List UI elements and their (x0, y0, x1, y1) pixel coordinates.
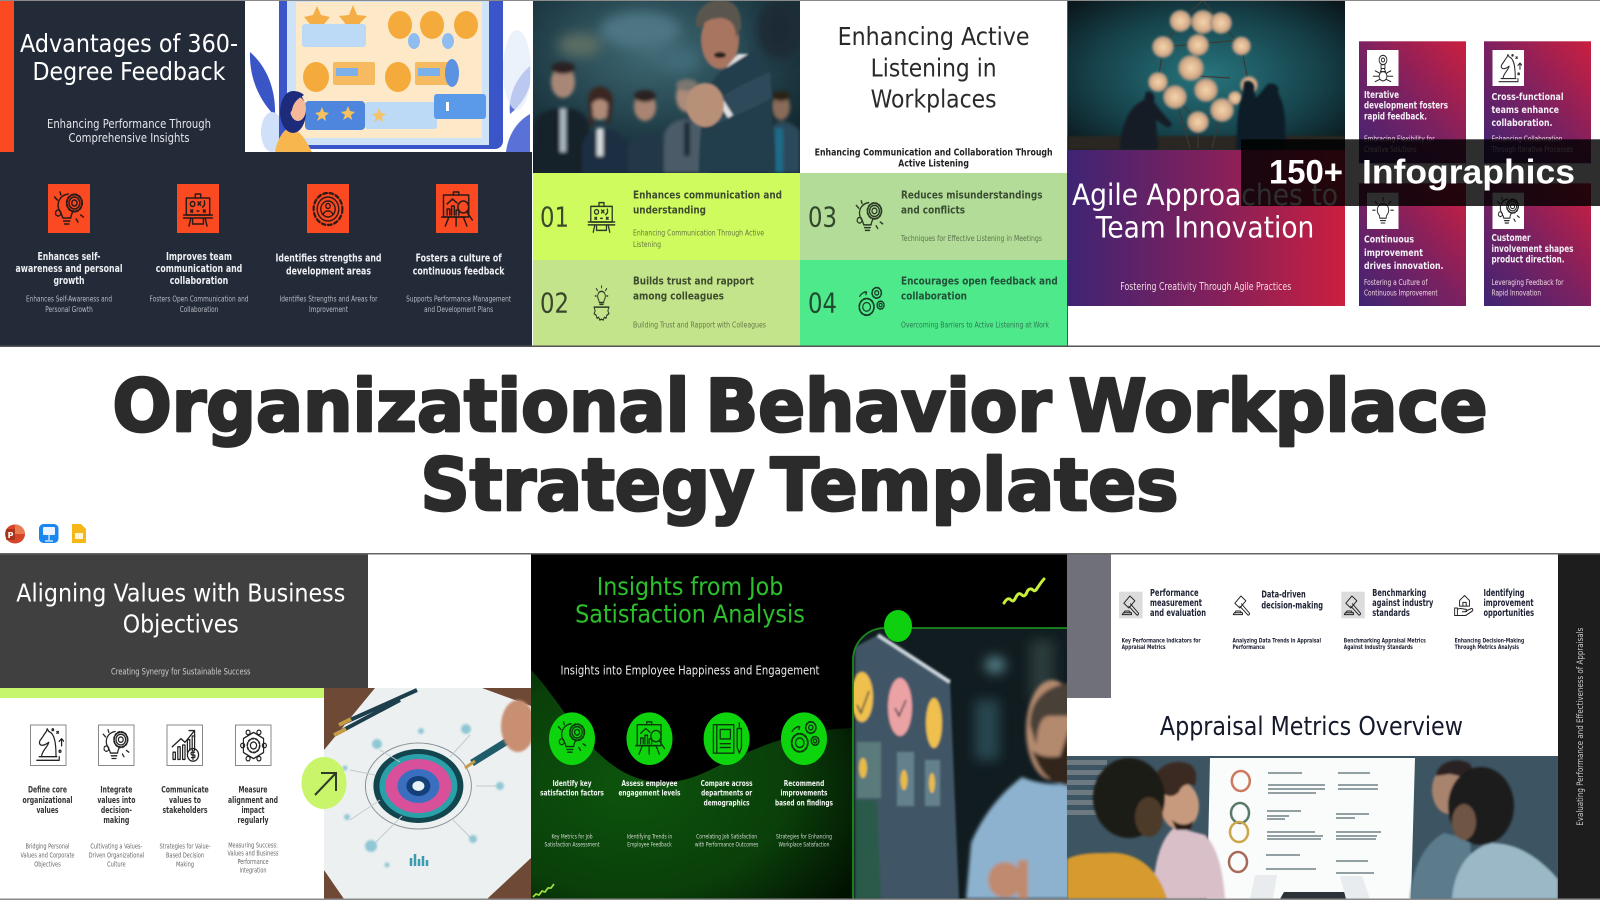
step 2 text: Integrate (100, 786, 132, 796)
metric 3 (1341, 588, 1433, 651)
icon: knight (30, 725, 66, 766)
item 1: self-awareness (16, 184, 122, 314)
item 3 text: Correlating Job Satisfaction (696, 833, 757, 840)
panel: Aligning Values with Business Objectives (0, 554, 535, 899)
item 3: strengths (276, 184, 382, 314)
title: Team Innovation (1095, 211, 1314, 245)
step 1 text: Define core (28, 786, 67, 796)
step 2 text: Culture (107, 860, 126, 868)
banner text (1269, 153, 1575, 191)
decor: green dot (884, 610, 912, 642)
panel: Agile Approaches to Team Innovation (1067, 0, 1600, 346)
icon: Keynote (39, 524, 58, 543)
card 3 text: drives innovation. (1364, 261, 1444, 272)
step 4 text: regularly (238, 816, 269, 826)
title (575, 572, 805, 629)
text 03: Techniques for Effective Listening in Meetings (900, 234, 1042, 243)
subtitle (47, 116, 211, 145)
item 2: team communication (150, 184, 249, 314)
step 1 (20, 725, 74, 868)
metric 3 text: Benchmarking (1372, 588, 1426, 599)
metric 2 text: Data-driven (1261, 590, 1306, 601)
item 2 text: Identifying Trends in (627, 833, 672, 840)
card 4 text (1492, 233, 1574, 297)
icon: gear bulb (1492, 193, 1524, 229)
number 01: 01 (540, 201, 569, 234)
text 02: Builds trust and rapport (633, 275, 754, 288)
step 3 text: Strategies for Value- (160, 842, 211, 850)
text 02: Building Trust and Rapport with Colleagues (633, 320, 766, 329)
icon: growth chart (167, 725, 202, 766)
step 3 text: Communicate (161, 786, 209, 796)
item 3 text: departments or (701, 789, 752, 798)
text: strengths: Identifies Strengths and Areas for (280, 294, 378, 304)
step 3 text: stakeholders (162, 806, 208, 816)
metric 1 text: Key Performance Indicators for (1122, 636, 1201, 644)
step 4 (228, 725, 279, 874)
text: continuous feedback: Fosters a culture of (416, 252, 502, 264)
illustration: feedback dashboard (245, 0, 532, 152)
number 02: 02 (540, 287, 569, 320)
icon: notebook badge (704, 712, 750, 765)
metric 4 text: Through Metrics Analysis (1455, 643, 1519, 651)
text: self-awareness (16, 251, 122, 314)
metric 2 (1232, 590, 1323, 651)
icon: Google Slides (72, 524, 86, 543)
metric 4 text: Identifying (1484, 588, 1524, 599)
card 2 text (1491, 92, 1573, 154)
icon: bulb gear (594, 286, 609, 320)
text: team communication: Improves team (166, 251, 232, 263)
metric 3 text: Benchmarking Appraisal Metrics (1344, 636, 1426, 644)
icon: gears (859, 288, 884, 315)
cell 04 (800, 260, 1067, 346)
main heading: Strategy (420, 443, 754, 527)
step 3 text: Based Decision (166, 851, 204, 859)
panel: Advantages of 360-Degree Feedback (0, 0, 532, 346)
arrow badge (302, 757, 346, 809)
card 3 text: improvement (1364, 248, 1423, 259)
icon: gear bulb (48, 184, 90, 233)
title: Degree Feedback (32, 57, 226, 86)
text 04 (901, 275, 1058, 329)
card 4 text: Customer (1492, 233, 1531, 244)
subtitle: Active Listening (898, 158, 969, 169)
card 2 (1484, 41, 1591, 163)
text: continuous feedback: continuous feedback (413, 266, 505, 278)
text 01: Enhancing Communication Through Active (633, 229, 764, 238)
title block: gradient (1067, 150, 1345, 306)
text: continuous feedback: Supports Performance Management (406, 294, 511, 304)
title: Enhancing Active (838, 22, 1030, 51)
item 4 text: improvements (780, 789, 828, 798)
text 03: and conflicts (901, 203, 965, 216)
step 4 text: Measure (238, 786, 268, 796)
main heading: Organizational (112, 364, 690, 448)
card 2 text: Through Iterative Processes (1491, 145, 1573, 154)
title (1072, 178, 1338, 245)
item 4 text: based on findings (775, 798, 833, 807)
metric 4 text: Enhancing Decision-Making (1455, 636, 1524, 644)
metric 1 text: measurement (1150, 598, 1202, 609)
card 4 text: product direction. (1492, 255, 1564, 266)
title (20, 29, 238, 86)
step 2 text: Driven Organizational (89, 851, 144, 859)
metric 4 text (1455, 588, 1534, 651)
step 1 text: Values and Corporate (20, 851, 74, 859)
step 3 text: Making (176, 860, 194, 868)
text: team communication: communication and (156, 263, 242, 275)
text: continuous feedback (406, 252, 511, 314)
text: strengths: development areas (286, 266, 371, 278)
title (838, 22, 1030, 113)
item 3 text: demographics (704, 798, 750, 807)
card 3 text (1364, 235, 1444, 297)
icon: PowerPoint: P (8, 531, 14, 540)
icon: board (588, 203, 615, 232)
title: Workplaces (871, 84, 997, 113)
text 04: collaboration (901, 290, 967, 303)
card 3 (1359, 183, 1466, 306)
text: self-awareness: growth (54, 275, 84, 287)
text 03: Reduces misunderstandings (901, 189, 1043, 202)
banner text: 150+ (1269, 153, 1343, 191)
photo: light sculpture (1068, 0, 1345, 150)
item 2 (618, 712, 681, 849)
item 4 (775, 712, 833, 849)
metric 1 text: Performance (1150, 588, 1198, 599)
card 1 text (1364, 90, 1448, 154)
step 2 text: decision- (101, 806, 132, 816)
metric 1 text: and evaluation (1150, 608, 1206, 619)
subtitle (815, 148, 1053, 169)
icon: gear bulb badge (549, 712, 595, 765)
grey block (1067, 554, 1111, 698)
step 4 text: Performance (238, 858, 268, 866)
title: Appraisal Metrics Overview (1160, 712, 1463, 742)
photo: team meeting at whiteboard (1067, 756, 1558, 899)
text: team communication: Fosters Open Communication and (150, 294, 249, 304)
icon: gear person (307, 184, 349, 233)
step 2 text (89, 786, 144, 868)
item 1 text: Satisfaction Assessment (544, 842, 600, 849)
icon: hand and house (1455, 596, 1473, 616)
text 01: understanding (633, 203, 706, 216)
text: continuous feedback: and Development Plans (424, 305, 493, 314)
banner: 150+ Infographics (1241, 139, 1600, 206)
subtitle: Insights into Employee Happiness and Engagement (560, 663, 820, 677)
cell 03 (800, 173, 1067, 260)
metric 1 (1119, 588, 1206, 651)
icon: gavel (1341, 592, 1365, 618)
cell 02 (533, 260, 800, 346)
title: Objectives (123, 609, 239, 638)
card 3 text: Continuous (1364, 235, 1414, 246)
main heading (112, 364, 1488, 527)
step 1 text: Objectives (34, 860, 61, 868)
icon: chess knight (1492, 50, 1524, 86)
green wave (531, 670, 860, 899)
main heading: Workplace (1068, 364, 1488, 448)
text 03 (900, 189, 1043, 243)
icon: robot bulb (1367, 50, 1398, 86)
step 2 text: Cultivating a Values- (90, 842, 143, 850)
step 4 text: alignment and (228, 796, 278, 806)
item 3 text: Compare across (701, 779, 753, 788)
item 1 text: satisfaction factors (540, 789, 604, 798)
step 4 text: impact (242, 806, 264, 816)
icon: chart board (436, 184, 478, 233)
item 1 text: Identify key (552, 779, 592, 788)
card 4 text: Leveraging Feedback for (1492, 278, 1564, 287)
app icons (5, 524, 86, 544)
card 1 text: Iterative (1364, 90, 1399, 101)
card 1 text: Creative Solutions (1364, 145, 1417, 154)
metric 1 text: Appraisal Metrics (1122, 643, 1166, 651)
card 1 text: rapid feedback. (1364, 111, 1427, 122)
title: Agile Approaches to (1072, 178, 1338, 212)
text: strengths (276, 252, 382, 314)
item 3 text: with Performance Outcomes (695, 842, 758, 849)
title: Satisfaction Analysis (575, 600, 805, 629)
step 2 (89, 725, 144, 868)
metric 3 text: Against Industry Standards (1344, 643, 1413, 651)
icon: gavel (1119, 592, 1143, 618)
title: Aligning Values with Business (16, 579, 345, 608)
accent bar (0, 0, 14, 152)
item 2 text: Assess employee (622, 779, 678, 788)
text 01 (633, 189, 782, 249)
step 4 text: Integration (240, 866, 266, 874)
main heading: Behavior (706, 364, 1052, 448)
text: team communication: collaboration (170, 275, 228, 287)
card 4 text: involvement shapes (1492, 244, 1574, 255)
metric 3 text (1344, 588, 1433, 651)
step 3 text (160, 786, 211, 868)
icon: strategy board (177, 184, 219, 233)
card 1 (1359, 41, 1466, 163)
text 02: among colleagues (633, 290, 724, 303)
metric 2 text: decision-making (1261, 601, 1323, 612)
text: self-awareness: Enhances self- (38, 251, 100, 263)
text 02 (633, 275, 766, 329)
text: self-awareness: awareness and personal (16, 263, 122, 275)
banner text: Infographics (1362, 153, 1575, 191)
title (16, 579, 345, 638)
metric 3 text: against industry (1372, 598, 1433, 609)
step 3 text: values to (169, 796, 201, 806)
photo: feedback board with smiling man (851, 628, 1078, 900)
number 04: 04 (808, 287, 837, 320)
subtitle: Enhancing Communication and Collaboration Through (815, 148, 1053, 159)
card 4 (1484, 183, 1591, 306)
icon: chart board badge (626, 712, 672, 765)
metric 2 text: Performance (1232, 643, 1265, 651)
card 1 text: development fosters (1364, 101, 1448, 112)
metric 4 text: opportunities (1484, 608, 1534, 619)
icon: light bulb (1367, 193, 1398, 229)
photo: target diagram on paper (324, 688, 535, 899)
item 1 (540, 712, 604, 849)
step 4 text: Values and Business (228, 850, 279, 858)
header band (0, 554, 368, 688)
metric 3 text: standards (1372, 608, 1410, 619)
panel: Enhancing Active Listening in Workplaces (532, 0, 1067, 346)
title: Advantages of 360- (20, 29, 238, 58)
step 2 text: values into (97, 796, 135, 806)
item 2 text: engagement levels (618, 789, 681, 798)
panel: Appraisal Metrics Overview (1067, 554, 1600, 899)
vertical subtitle: Evaluating Performance and Effectiveness of Appraisals (1576, 627, 1586, 826)
number 03: 03 (808, 201, 837, 234)
item 4 text: Workplace Satisfaction (778, 842, 830, 849)
text: team communication: Collaboration (180, 305, 218, 314)
step 1 text: values (36, 806, 58, 816)
item 1 text (540, 779, 604, 849)
metric 4 text: improvement (1484, 598, 1534, 609)
card 2 text: teams enhance (1492, 105, 1559, 116)
card 2 text: collaboration. (1492, 118, 1552, 129)
decor: lime squiggle (1004, 579, 1044, 603)
panel: Insights from Job Satisfaction Analysis (531, 554, 1078, 900)
icon: gear bulb (856, 201, 883, 230)
step 3 (160, 725, 211, 868)
item 1 text: Key Metrics for Job (552, 833, 593, 840)
image frame (853, 628, 1067, 899)
item 3 text (695, 779, 758, 849)
metric 2 text: Analyzing Data Trends in Appraisal (1232, 636, 1321, 644)
text: self-awareness: Personal Growth (45, 305, 93, 314)
metric 1 text (1122, 588, 1206, 651)
icon: gear bulb (98, 725, 134, 766)
item 3 (695, 712, 758, 849)
text 01: Listening (633, 240, 661, 249)
title: Listening in (871, 54, 997, 83)
subtitle: Creating Synergy for Sustainable Success (111, 667, 251, 677)
step 1 text: organizational (22, 796, 72, 806)
metric 2 text (1232, 590, 1323, 651)
step 4 text (228, 786, 279, 874)
metric 4 (1455, 588, 1534, 651)
icon: network gear (236, 725, 271, 766)
subtitle: Fostering Creativity Through Agile Practices (1120, 281, 1291, 293)
card 3 text: Fostering a Culture of (1364, 278, 1428, 287)
item 2 text (618, 779, 681, 849)
text: self-awareness: Enhances Self-Awareness and (26, 294, 112, 304)
card 4 text: Rapid Innovation (1492, 288, 1541, 297)
card 2 text: Enhancing Collaboration (1492, 135, 1563, 144)
subtitle: Enhancing Performance Through (47, 116, 211, 131)
decor: small squiggle (533, 884, 554, 897)
text: strengths: Improvement (309, 305, 348, 314)
text 01: Enhances communication and (633, 189, 782, 202)
side strip (1558, 554, 1600, 899)
text 04: Encourages open feedback and (901, 275, 1058, 288)
title: Insights from Job (597, 572, 783, 601)
item 4 text: Strategies for Enhancing (776, 833, 832, 840)
icon: gears badge (781, 712, 827, 765)
cell 01 (533, 173, 800, 260)
text: strengths: Identifies strengths and (276, 252, 382, 264)
photo: businessman pointing (533, 0, 804, 173)
text: team communication (150, 251, 249, 314)
item 4 text (775, 779, 833, 849)
card 3 text: Continuous Improvement (1364, 288, 1438, 297)
item 2 text: Employee Feedback (627, 842, 672, 849)
step 1 text (20, 786, 74, 868)
icon: diagonal arrow (315, 773, 336, 795)
card 2 text: Cross-functional (1492, 92, 1564, 103)
subtitle: Comprehensive Insights (68, 130, 190, 145)
main heading: Templates (770, 443, 1178, 527)
step 4 text: Measuring Success: (228, 841, 278, 849)
step 2 text: making (103, 816, 129, 826)
card 1 text: Embracing Flexibility for (1364, 135, 1435, 144)
step 1 text: Bridging Personal (26, 842, 70, 850)
item 4 text: Recommend (784, 779, 825, 788)
icon: gavel (1233, 596, 1250, 615)
item 4: continuous feedback (406, 184, 511, 314)
lime strip (0, 688, 324, 698)
text 04: Overcoming Barriers to Active Listening at Work (901, 320, 1049, 329)
